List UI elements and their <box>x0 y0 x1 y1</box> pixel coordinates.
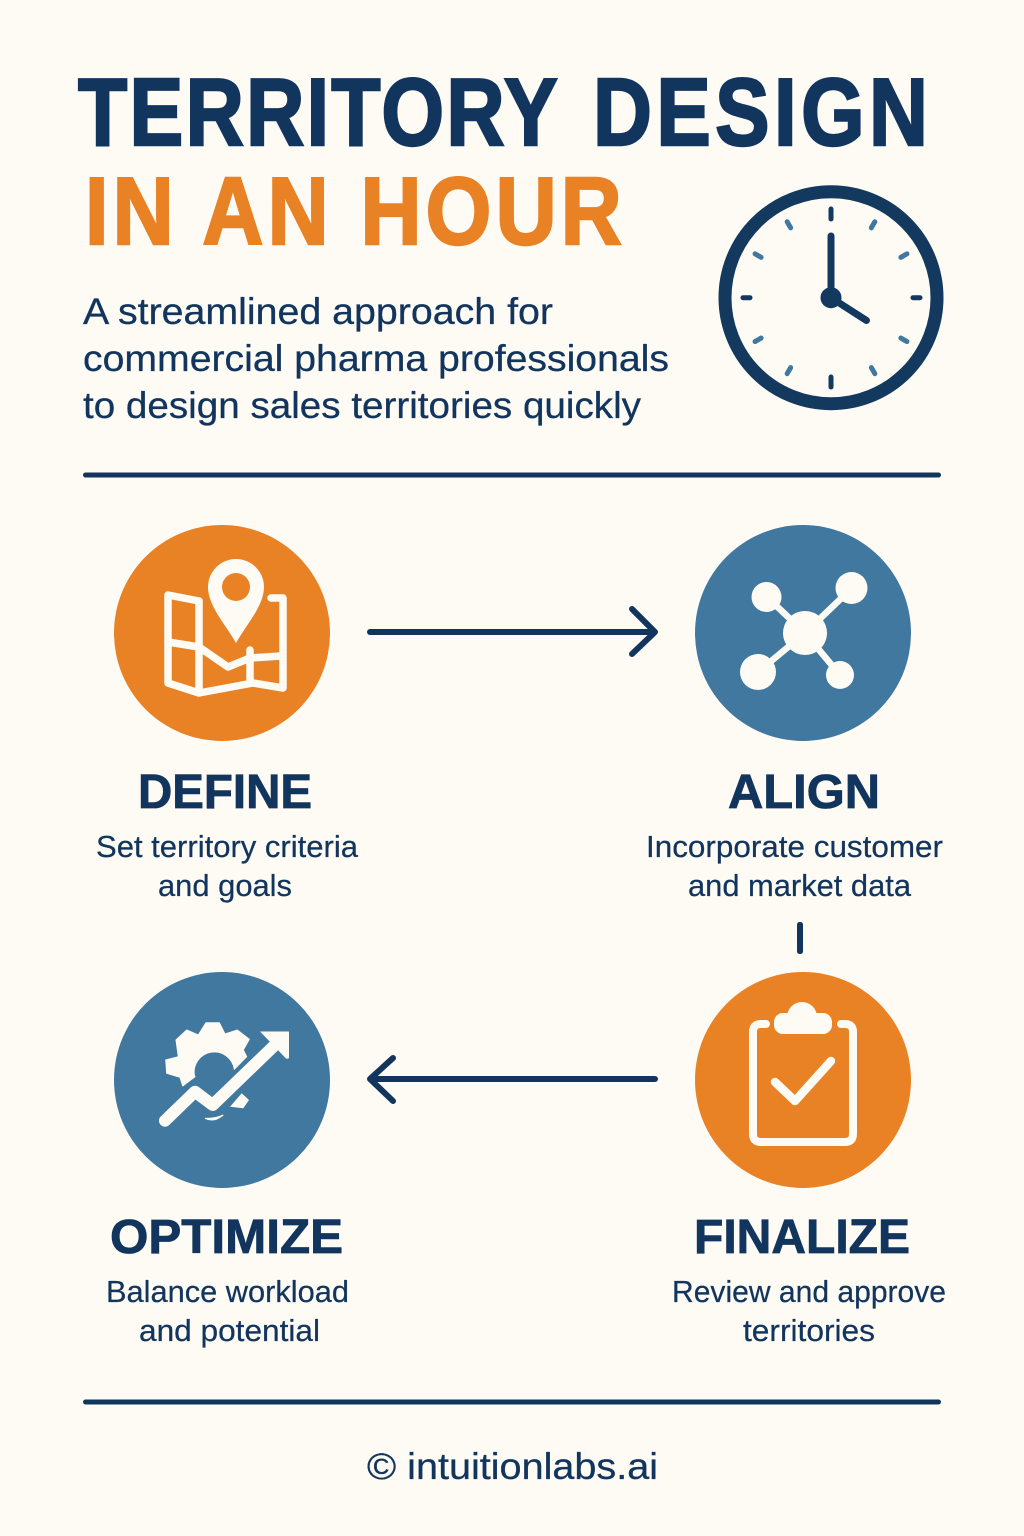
description: define: and goals <box>158 868 292 903</box>
description: optimize: Balance workload <box>106 1274 349 1309</box>
subtitle: commercial pharma professionals <box>83 338 669 379</box>
description: optimize <box>106 1274 349 1348</box>
step: define <box>96 525 359 903</box>
description: finalize <box>672 1274 946 1348</box>
step: align <box>646 525 943 903</box>
connector: align to finalize <box>797 922 803 954</box>
icon: map with location pin <box>114 525 330 741</box>
icon: network nodes <box>695 525 911 741</box>
step: finalize <box>672 972 946 1348</box>
title <box>78 58 928 265</box>
arrow: finalize to optimize <box>370 1058 655 1101</box>
title: TERRITORY <box>78 58 558 166</box>
footer: © intuitionlabs.ai <box>367 1446 658 1487</box>
step: optimize <box>106 972 349 1348</box>
description: align: and market data <box>688 868 912 903</box>
description: optimize: and potential <box>139 1313 320 1348</box>
subtitle: A streamlined approach for <box>83 291 553 332</box>
description: align: Incorporate customer <box>646 829 943 864</box>
title: IN AN HOUR <box>85 158 622 265</box>
icon: clipboard with check <box>695 972 911 1188</box>
heading: optimize: OPTIMIZE <box>110 1211 343 1264</box>
arrow: define to align <box>370 609 655 654</box>
description: define <box>96 829 359 903</box>
heading: align: ALIGN <box>728 766 880 819</box>
icon: gear with rising arrow <box>114 972 330 1188</box>
heading: finalize: FINALIZE <box>694 1211 910 1264</box>
top divider <box>83 472 941 478</box>
description: finalize: Review and approve <box>672 1274 946 1309</box>
subtitle: to design sales territories quickly <box>83 385 642 426</box>
icon: clock <box>725 192 937 404</box>
description: finalize: territories <box>743 1313 875 1348</box>
title: DESIGN <box>593 58 928 165</box>
subtitle <box>83 291 669 426</box>
description: align <box>646 829 943 903</box>
bottom divider <box>83 1400 941 1404</box>
description: define: Set territory criteria <box>96 829 359 864</box>
heading: define: DEFINE <box>138 766 312 819</box>
